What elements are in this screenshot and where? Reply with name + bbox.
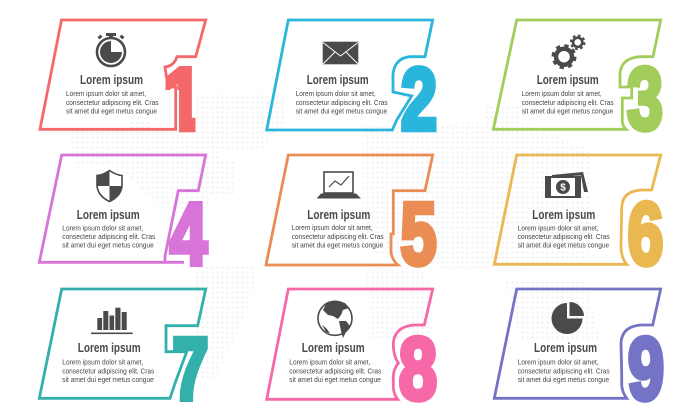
number 8: 8	[399, 320, 437, 418]
body text 5: sit amet dui eget metus congue	[292, 242, 383, 250]
number 2: 2	[401, 51, 437, 149]
body text 3	[522, 90, 614, 116]
number 4: 4	[170, 185, 208, 284]
icon: globe	[318, 301, 352, 338]
panel 7 outline	[39, 289, 206, 398]
title 2: Lorem ipsum	[307, 73, 369, 87]
icon: stopwatch	[97, 33, 125, 66]
body text 6: Lorem ipsum dolor sit amet,	[518, 224, 599, 232]
panel 5	[266, 155, 437, 283]
body text 2: consectetur adipiscing elit. Cras	[296, 99, 388, 107]
body text 8: consectetur adipiscing elit. Cras	[289, 368, 382, 376]
panel 2 outline	[267, 20, 433, 130]
number 3: 3	[627, 50, 663, 148]
title 5: Lorem ipsum	[307, 208, 370, 222]
body text 7: Lorem ipsum dolor sit amet,	[62, 358, 143, 366]
title 8: Lorem ipsum	[302, 341, 365, 355]
body text 6	[518, 224, 610, 250]
body text 5: consectetur adipiscing elit. Cras	[292, 233, 384, 241]
number 6: 6	[628, 185, 663, 283]
panel 8 outline	[267, 289, 433, 399]
panel 6 outline	[494, 155, 661, 264]
number 9: 9	[628, 321, 664, 418]
body text 4	[62, 224, 156, 250]
body text 8: sit amet dui eget metus congue	[289, 376, 381, 384]
panel 3	[493, 20, 663, 148]
body text 8	[289, 358, 382, 384]
body text 4: consectetur adipiscing elit. Cras	[62, 233, 156, 241]
title 3: Lorem ipsum	[537, 73, 599, 87]
body text 9: sit amet dui eget metus congue	[518, 376, 609, 384]
panel 4	[39, 155, 208, 284]
icon: banknotes	[545, 172, 588, 198]
body text 2: sit amet dui eget metus congue	[296, 108, 387, 116]
panel 2	[267, 20, 437, 149]
icon: laptop with chart	[317, 172, 361, 198]
background dotted world map	[70, 93, 600, 378]
title 4: Lorem ipsum	[77, 208, 140, 222]
body text 3: consectetur adipiscing elit. Cras	[522, 99, 614, 107]
body text 9: consectetur adipiscing elit. Cras	[518, 368, 610, 376]
panel 7	[39, 289, 209, 419]
body text 9	[518, 358, 610, 384]
title 1: Lorem ipsum	[80, 73, 143, 87]
body text 1: sit amet dui eget metus congue	[66, 108, 157, 116]
body text 8: Lorem ipsum dolor sit amet,	[289, 358, 370, 366]
icon: shield	[97, 170, 122, 202]
body text 6: consectetur adipiscing elit. Cras	[518, 233, 610, 241]
panel 4 outline	[39, 155, 206, 262]
number 1: 1	[163, 51, 203, 149]
body text 1: consectetur adipiscing elit. Cras	[66, 99, 159, 107]
body text 3: sit amet dui eget metus congue	[522, 108, 613, 116]
body text 3: Lorem ipsum dolor sit amet,	[522, 90, 602, 98]
body text 5: Lorem ipsum dolor sit amet,	[292, 224, 373, 232]
number 7: 7	[172, 321, 209, 419]
panel 6	[494, 155, 663, 283]
body text 7: sit amet dui eget metus congue	[62, 376, 154, 384]
panel 9	[494, 289, 664, 418]
number 5: 5	[400, 186, 437, 283]
body text 2	[296, 90, 388, 116]
body text 4: Lorem ipsum dolor sit amet,	[62, 224, 143, 232]
panel 9 outline	[494, 289, 661, 398]
icon: envelope	[323, 42, 358, 64]
title 7: Lorem ipsum	[78, 341, 141, 355]
icon: pie chart	[551, 302, 584, 334]
body text 1: Lorem ipsum dolor sit amet,	[66, 90, 146, 98]
panel 1	[40, 20, 206, 149]
title 9: Lorem ipsum	[534, 341, 597, 355]
body text 6: sit amet dui eget metus congue	[518, 242, 609, 250]
body text 1	[66, 90, 159, 116]
panel 8	[267, 289, 437, 418]
body text 7	[62, 358, 155, 384]
body text 9: Lorem ipsum dolor sit amet,	[518, 358, 599, 366]
panel 5 outline	[266, 155, 433, 265]
panel 3 outline	[493, 20, 661, 129]
body text 4: sit amet dui eget metus congue	[62, 242, 154, 250]
panel 1 outline	[40, 20, 206, 129]
icon: banknotes: $	[560, 182, 566, 194]
body text 5	[292, 224, 384, 250]
body text 2: Lorem ipsum dolor sit amet,	[296, 90, 376, 98]
icon: gears	[553, 36, 584, 68]
title 6: Lorem ipsum	[532, 208, 595, 222]
icon: bar chart	[91, 308, 133, 334]
body text 7: consectetur adipiscing elit. Cras	[62, 368, 155, 376]
